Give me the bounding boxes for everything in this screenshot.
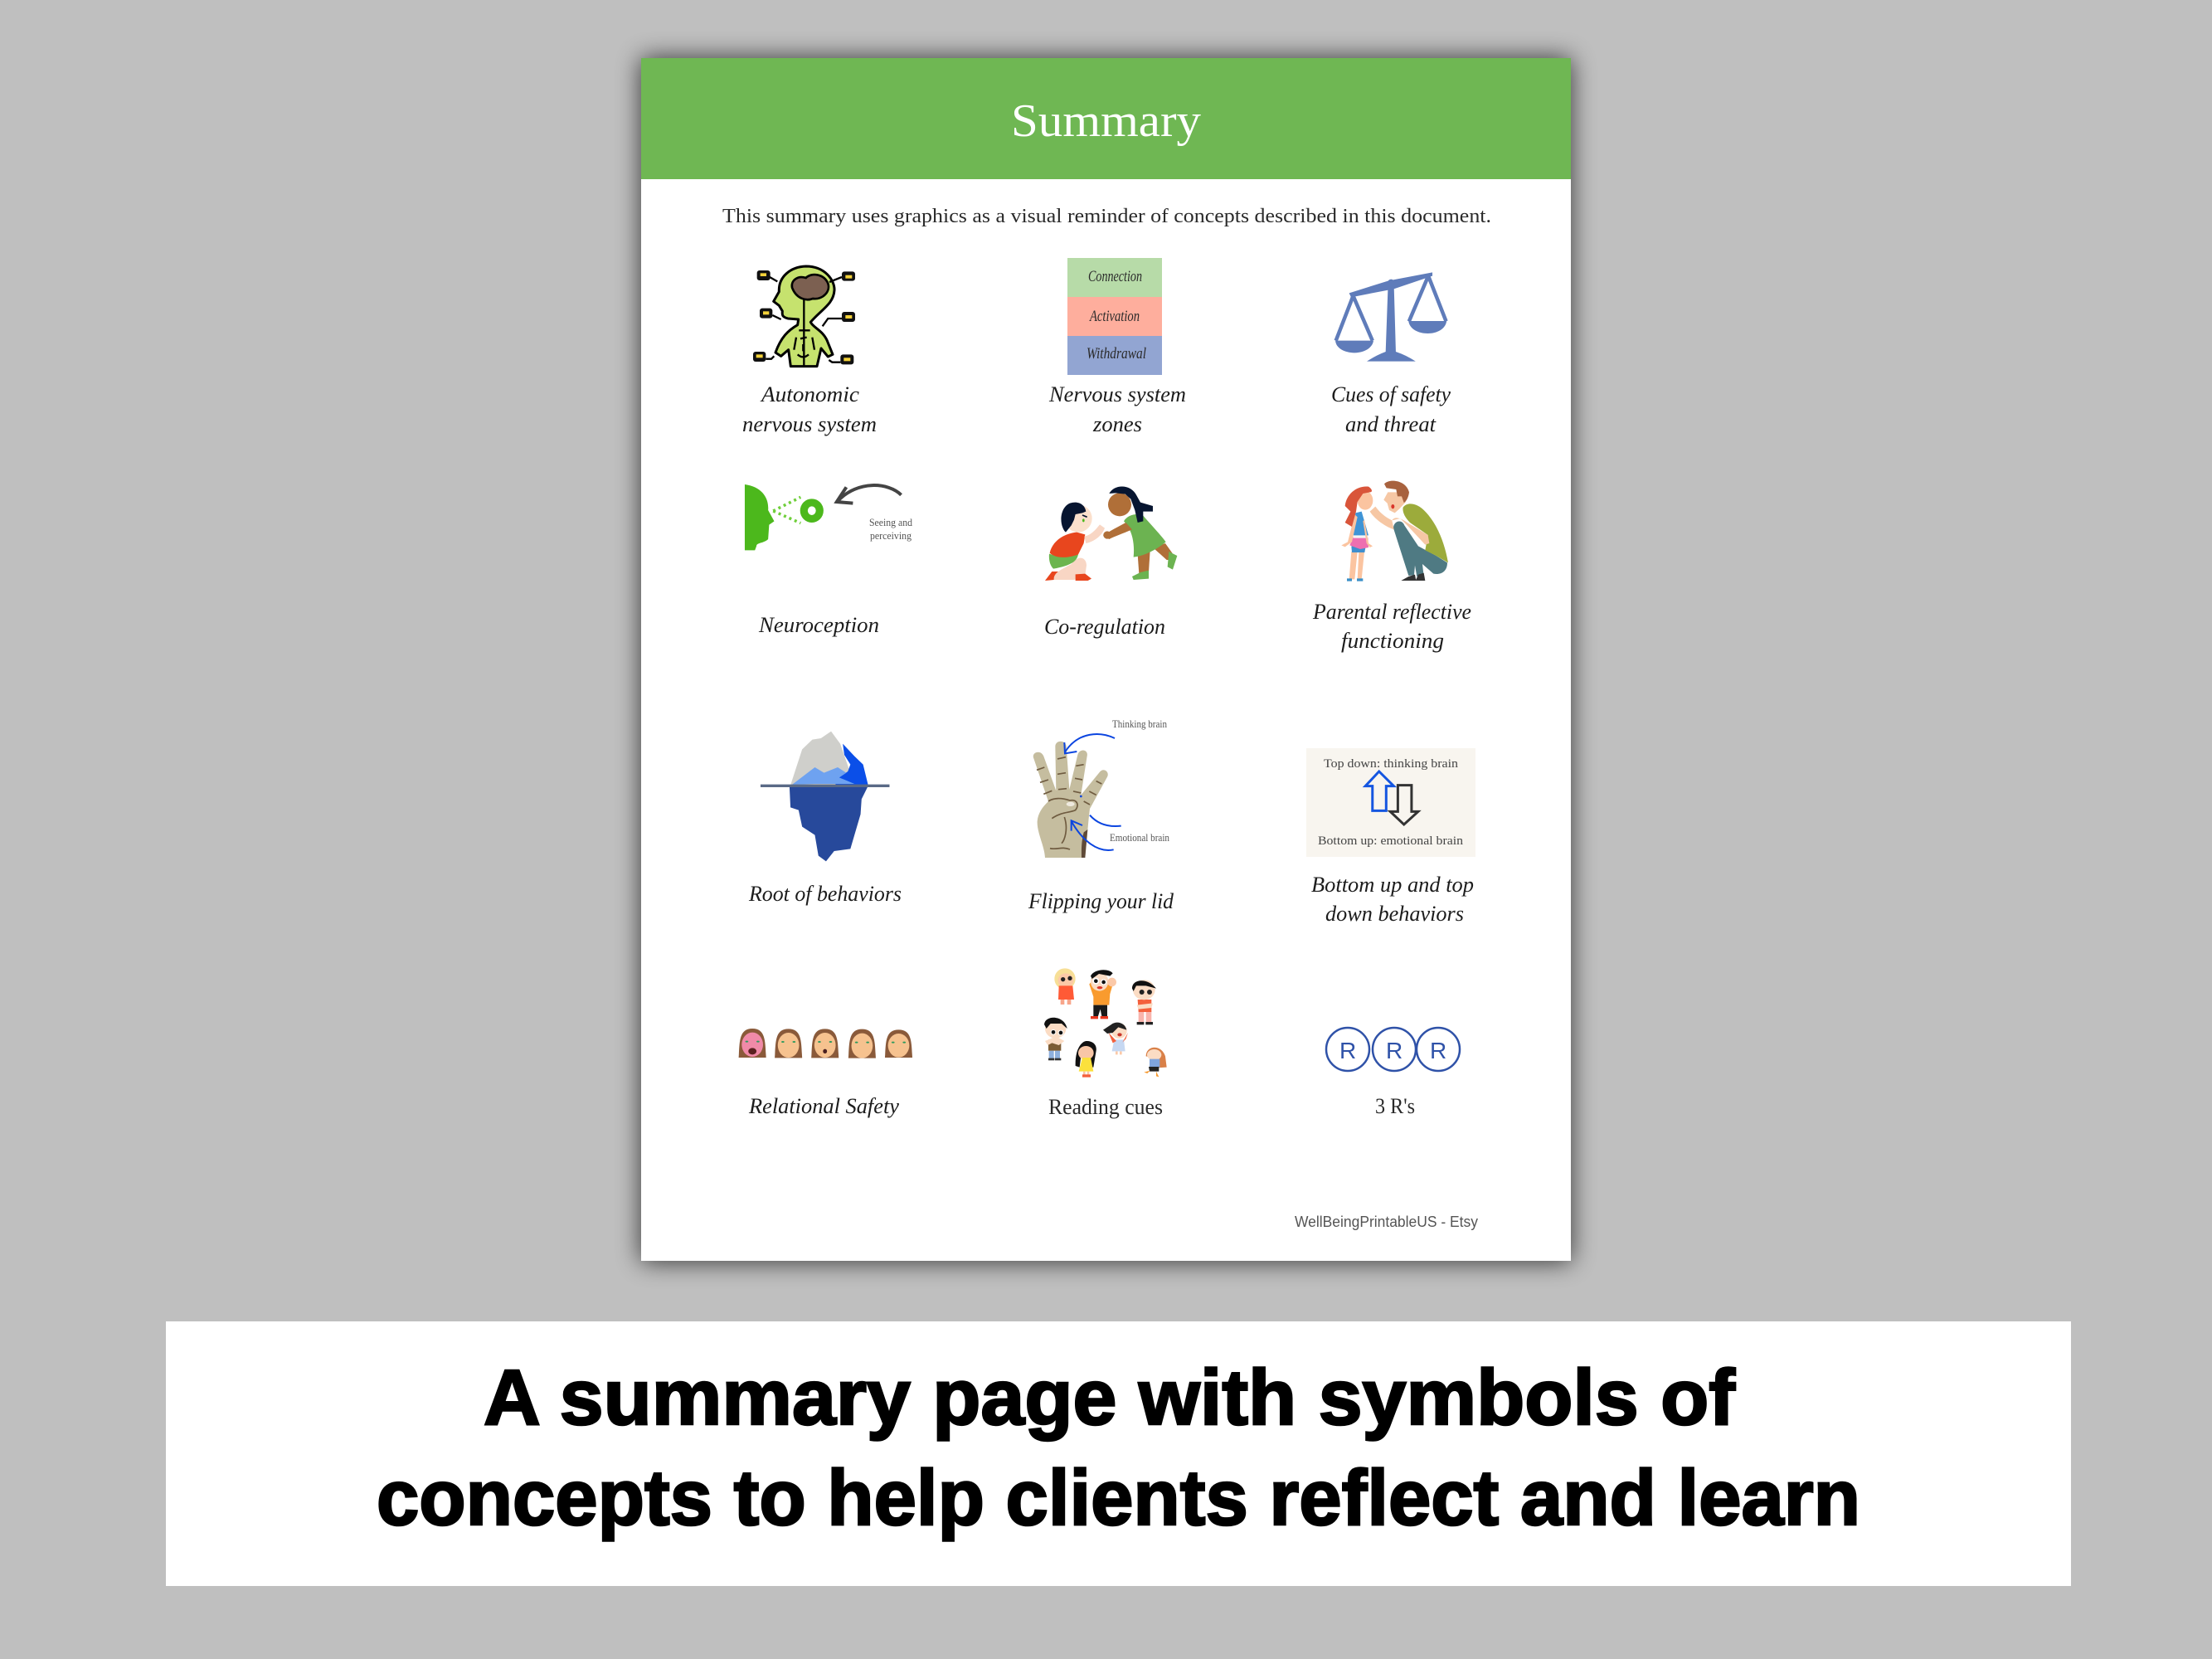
title: Summary [1011, 95, 1201, 147]
arrow text: perceiving [870, 529, 912, 542]
label: Nervous system [1048, 382, 1186, 406]
arrow text [869, 516, 912, 542]
item: root of behaviors [748, 732, 902, 906]
item: flipping your lid [1028, 718, 1174, 913]
icon: hand model of the brain [1033, 734, 1121, 858]
label: Cues of safety [1331, 382, 1451, 406]
caption line 2: concepts to help clients reflect and learn [377, 1454, 1860, 1542]
label: nervous system [742, 412, 877, 436]
item: bottom up and top down [1306, 748, 1475, 926]
item: cues of safety and threat [1331, 272, 1451, 436]
label [1311, 873, 1474, 926]
label: Neuroception [758, 613, 879, 637]
item: co-regulation [1044, 486, 1177, 639]
footer credit: WellBeingPrintableUS - Etsy [1295, 1214, 1478, 1230]
icon: zone bars: Activation [1088, 308, 1140, 325]
label: Co-regulation [1044, 615, 1165, 639]
icon: iceberg [761, 732, 889, 861]
icon: zone bars [1067, 258, 1162, 375]
icon: group of children [1044, 968, 1167, 1078]
label: zones [1092, 412, 1142, 436]
intro text: This summary uses graphics as a visual reminder of concepts described in this document. [722, 206, 1491, 227]
caption line 1: A summary page with symbols of [484, 1354, 1735, 1442]
icon: zone bars: Connection [1088, 268, 1142, 285]
item: nervous system zones [1048, 258, 1186, 436]
hand text: Thinking brain [1112, 718, 1167, 730]
item: autonomic nervous system [742, 266, 877, 436]
label: Relational Safety [748, 1094, 899, 1118]
icon: zone bars: Withdrawal [1087, 345, 1146, 362]
icon: arrows card [1306, 748, 1475, 857]
label [1048, 382, 1186, 436]
icon: row of faces [739, 1029, 912, 1058]
icon: three R circles: R [1430, 1038, 1446, 1063]
label: Parental reflective [1312, 600, 1471, 624]
label: Flipping your lid [1028, 889, 1174, 913]
label: 3 R's [1375, 1094, 1415, 1118]
icon: three R circles: R [1386, 1038, 1403, 1063]
hand text [1110, 718, 1169, 844]
item: neuroception [745, 484, 912, 637]
item: relational safety [739, 1029, 912, 1118]
label: down behaviors [1325, 902, 1464, 926]
label: Reading cues [1048, 1095, 1163, 1119]
icon: balance scale [1335, 272, 1446, 362]
icon: body with nervous system [753, 266, 855, 367]
icon: arrows card: Top down: thinking brain [1324, 757, 1459, 771]
icon: parent and child [1341, 481, 1448, 581]
arrow text: Seeing and [869, 516, 912, 528]
label: Bottom up and top [1311, 873, 1474, 897]
header band [641, 58, 1571, 179]
icon: arrows card: Bottom up: emotional brain [1318, 834, 1464, 848]
icon: three R circles [1326, 1028, 1460, 1071]
icon: three R circles: R [1339, 1038, 1356, 1063]
label: Autonomic [760, 382, 859, 406]
label: Root of behaviors [748, 882, 902, 906]
label [742, 382, 877, 436]
label: functioning [1341, 629, 1444, 653]
label [1312, 600, 1471, 653]
label: and threat [1345, 412, 1437, 436]
hand text: Emotional brain [1110, 831, 1169, 844]
icon: two children [1045, 486, 1177, 581]
item: parental reflective functioning [1312, 481, 1471, 653]
caption panel [166, 1321, 2071, 1586]
item: 3 Rs [1326, 1028, 1460, 1118]
icon: head seeing [745, 484, 902, 550]
label [1331, 382, 1451, 436]
item: reading cues [1044, 968, 1167, 1119]
panel: summary page [641, 58, 1571, 1261]
